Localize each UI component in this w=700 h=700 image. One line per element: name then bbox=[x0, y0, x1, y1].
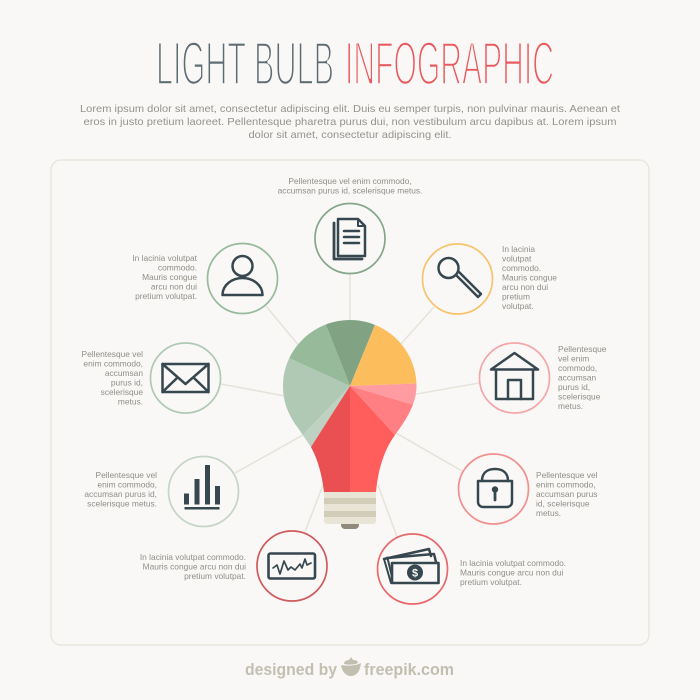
item: home bbox=[480, 343, 607, 413]
icon: pulse monitor bbox=[268, 554, 315, 578]
item: chart bbox=[84, 456, 238, 526]
icon: bar chart bbox=[184, 465, 220, 510]
caption: pulse monitor bbox=[140, 552, 246, 581]
title: LIGHT BULB bbox=[156, 29, 334, 97]
caption: user: In lacinia volutpat bbox=[132, 253, 198, 263]
item: magnifier bbox=[422, 244, 557, 314]
caption: user: Mauris congue bbox=[142, 272, 197, 282]
caption: mail: metus. bbox=[118, 396, 143, 406]
caption: pulse monitor: In lacinia volutpat commodo. bbox=[140, 552, 246, 562]
caption: magnifier bbox=[502, 244, 557, 311]
icon: magnifier bbox=[438, 258, 481, 297]
footer credit bbox=[245, 657, 454, 679]
caption: home: commodo, bbox=[558, 363, 597, 373]
caption: lock: Pellentesque vel bbox=[536, 470, 598, 480]
icon: mail bbox=[162, 364, 208, 392]
icon: lock bbox=[478, 469, 512, 507]
item: lock bbox=[458, 454, 598, 524]
item: mail bbox=[82, 343, 220, 413]
caption: document: accumsan purus id, scelerisque metus. bbox=[278, 186, 422, 196]
footer credit: designed by bbox=[245, 661, 338, 679]
light bulb bbox=[283, 320, 416, 529]
caption: magnifier: Mauris congue bbox=[502, 272, 557, 282]
caption: chart: enim commodo, bbox=[97, 480, 157, 490]
icon circle: user bbox=[208, 244, 278, 314]
caption: pulse monitor: pretium volutpat. bbox=[184, 571, 246, 581]
caption: home: vel enim bbox=[558, 354, 589, 364]
icon: home bbox=[491, 353, 538, 399]
icon: money bbox=[384, 549, 438, 583]
caption: money: Mauris congue arcu non dui bbox=[460, 568, 563, 578]
caption: home: Pellentesque bbox=[558, 344, 607, 354]
caption: document bbox=[278, 176, 422, 196]
caption: home: scelerisque bbox=[558, 392, 601, 402]
caption: chart bbox=[84, 470, 157, 508]
bulb pie slices bbox=[283, 320, 416, 492]
caption: money: In lacinia volutpat commodo. bbox=[460, 558, 566, 568]
caption: mail: purus id, bbox=[111, 378, 143, 388]
caption: lock: id, scelerisque bbox=[536, 498, 590, 508]
main panel bbox=[51, 160, 649, 645]
caption: magnifier: volutpat. bbox=[502, 301, 534, 311]
icon circle: money bbox=[378, 534, 448, 604]
caption: magnifier: arcu non dui bbox=[502, 282, 548, 292]
intro text: Lorem ipsum dolor sit amet, consectetur adipiscing elit. Duis eu semper turpis, non pulvinar mauris. Aenean et bbox=[80, 104, 620, 115]
icon: freepik logo bbox=[341, 657, 361, 676]
caption: user: arcu non dui bbox=[151, 282, 197, 292]
caption: mail: enim commodo, bbox=[83, 358, 143, 368]
caption: lock bbox=[536, 470, 598, 518]
caption: pulse monitor: Mauris congue arcu non dui bbox=[143, 562, 246, 572]
item: user bbox=[132, 244, 278, 314]
caption: home: purus id, bbox=[558, 382, 590, 392]
caption: home: accumsan bbox=[558, 372, 597, 382]
caption: user bbox=[132, 253, 198, 301]
intro text bbox=[80, 104, 620, 141]
caption: chart: Pellentesque vel bbox=[96, 470, 157, 480]
caption: mail: Pellentesque vel bbox=[82, 349, 143, 359]
footer credit: freepik.com bbox=[364, 661, 454, 679]
connector lines bbox=[221, 272, 479, 537]
caption: magnifier: volutpat bbox=[502, 254, 532, 264]
bulb base bbox=[324, 492, 376, 529]
icon circle: mail bbox=[150, 343, 220, 413]
caption: home: metus. bbox=[558, 401, 583, 411]
icon circle: home bbox=[480, 343, 550, 413]
caption: mail: accumsan bbox=[105, 368, 143, 378]
item: pulse monitor bbox=[140, 531, 327, 601]
item: document bbox=[278, 176, 422, 274]
icon circle: pulse monitor bbox=[257, 531, 327, 601]
caption: chart: scelerisque metus. bbox=[87, 498, 157, 508]
icon circle: chart bbox=[168, 456, 238, 526]
icon circle: magnifier bbox=[422, 244, 492, 314]
caption: magnifier: commodo. bbox=[502, 263, 541, 273]
money symbol: $ bbox=[412, 568, 418, 580]
caption: lock: metus. bbox=[536, 508, 561, 518]
item: money bbox=[378, 534, 566, 604]
caption: magnifier: In lacinia bbox=[502, 244, 535, 254]
caption: document: Pellentesque vel enim commodo, bbox=[288, 176, 412, 186]
caption: magnifier: pretium bbox=[502, 292, 530, 302]
caption: money: pretium volutpat. bbox=[460, 577, 522, 587]
caption: user: commodo. bbox=[158, 262, 197, 272]
caption: lock: enim commodo, bbox=[536, 480, 596, 490]
caption: lock: accumsan purus bbox=[536, 489, 597, 499]
caption: chart: accumsan purus id, bbox=[84, 489, 157, 499]
icon: user bbox=[222, 256, 262, 295]
caption: mail: scelerisque bbox=[101, 387, 143, 397]
caption: mail bbox=[82, 349, 143, 406]
caption: money bbox=[460, 558, 566, 587]
caption: user: pretium volutpat. bbox=[135, 291, 197, 301]
intro text: dolor sit amet, consectetur adipiscing elit. bbox=[248, 130, 452, 141]
icon circle: lock bbox=[458, 454, 528, 524]
caption: home bbox=[558, 344, 607, 411]
icon: document bbox=[334, 219, 365, 259]
icon circle: document bbox=[315, 204, 385, 274]
intro text: eros in justo pretium laoreet. Pellentesque pharetra purus dui, non vestibulum arcu dapibus at. Lorem ipsum bbox=[84, 117, 616, 128]
